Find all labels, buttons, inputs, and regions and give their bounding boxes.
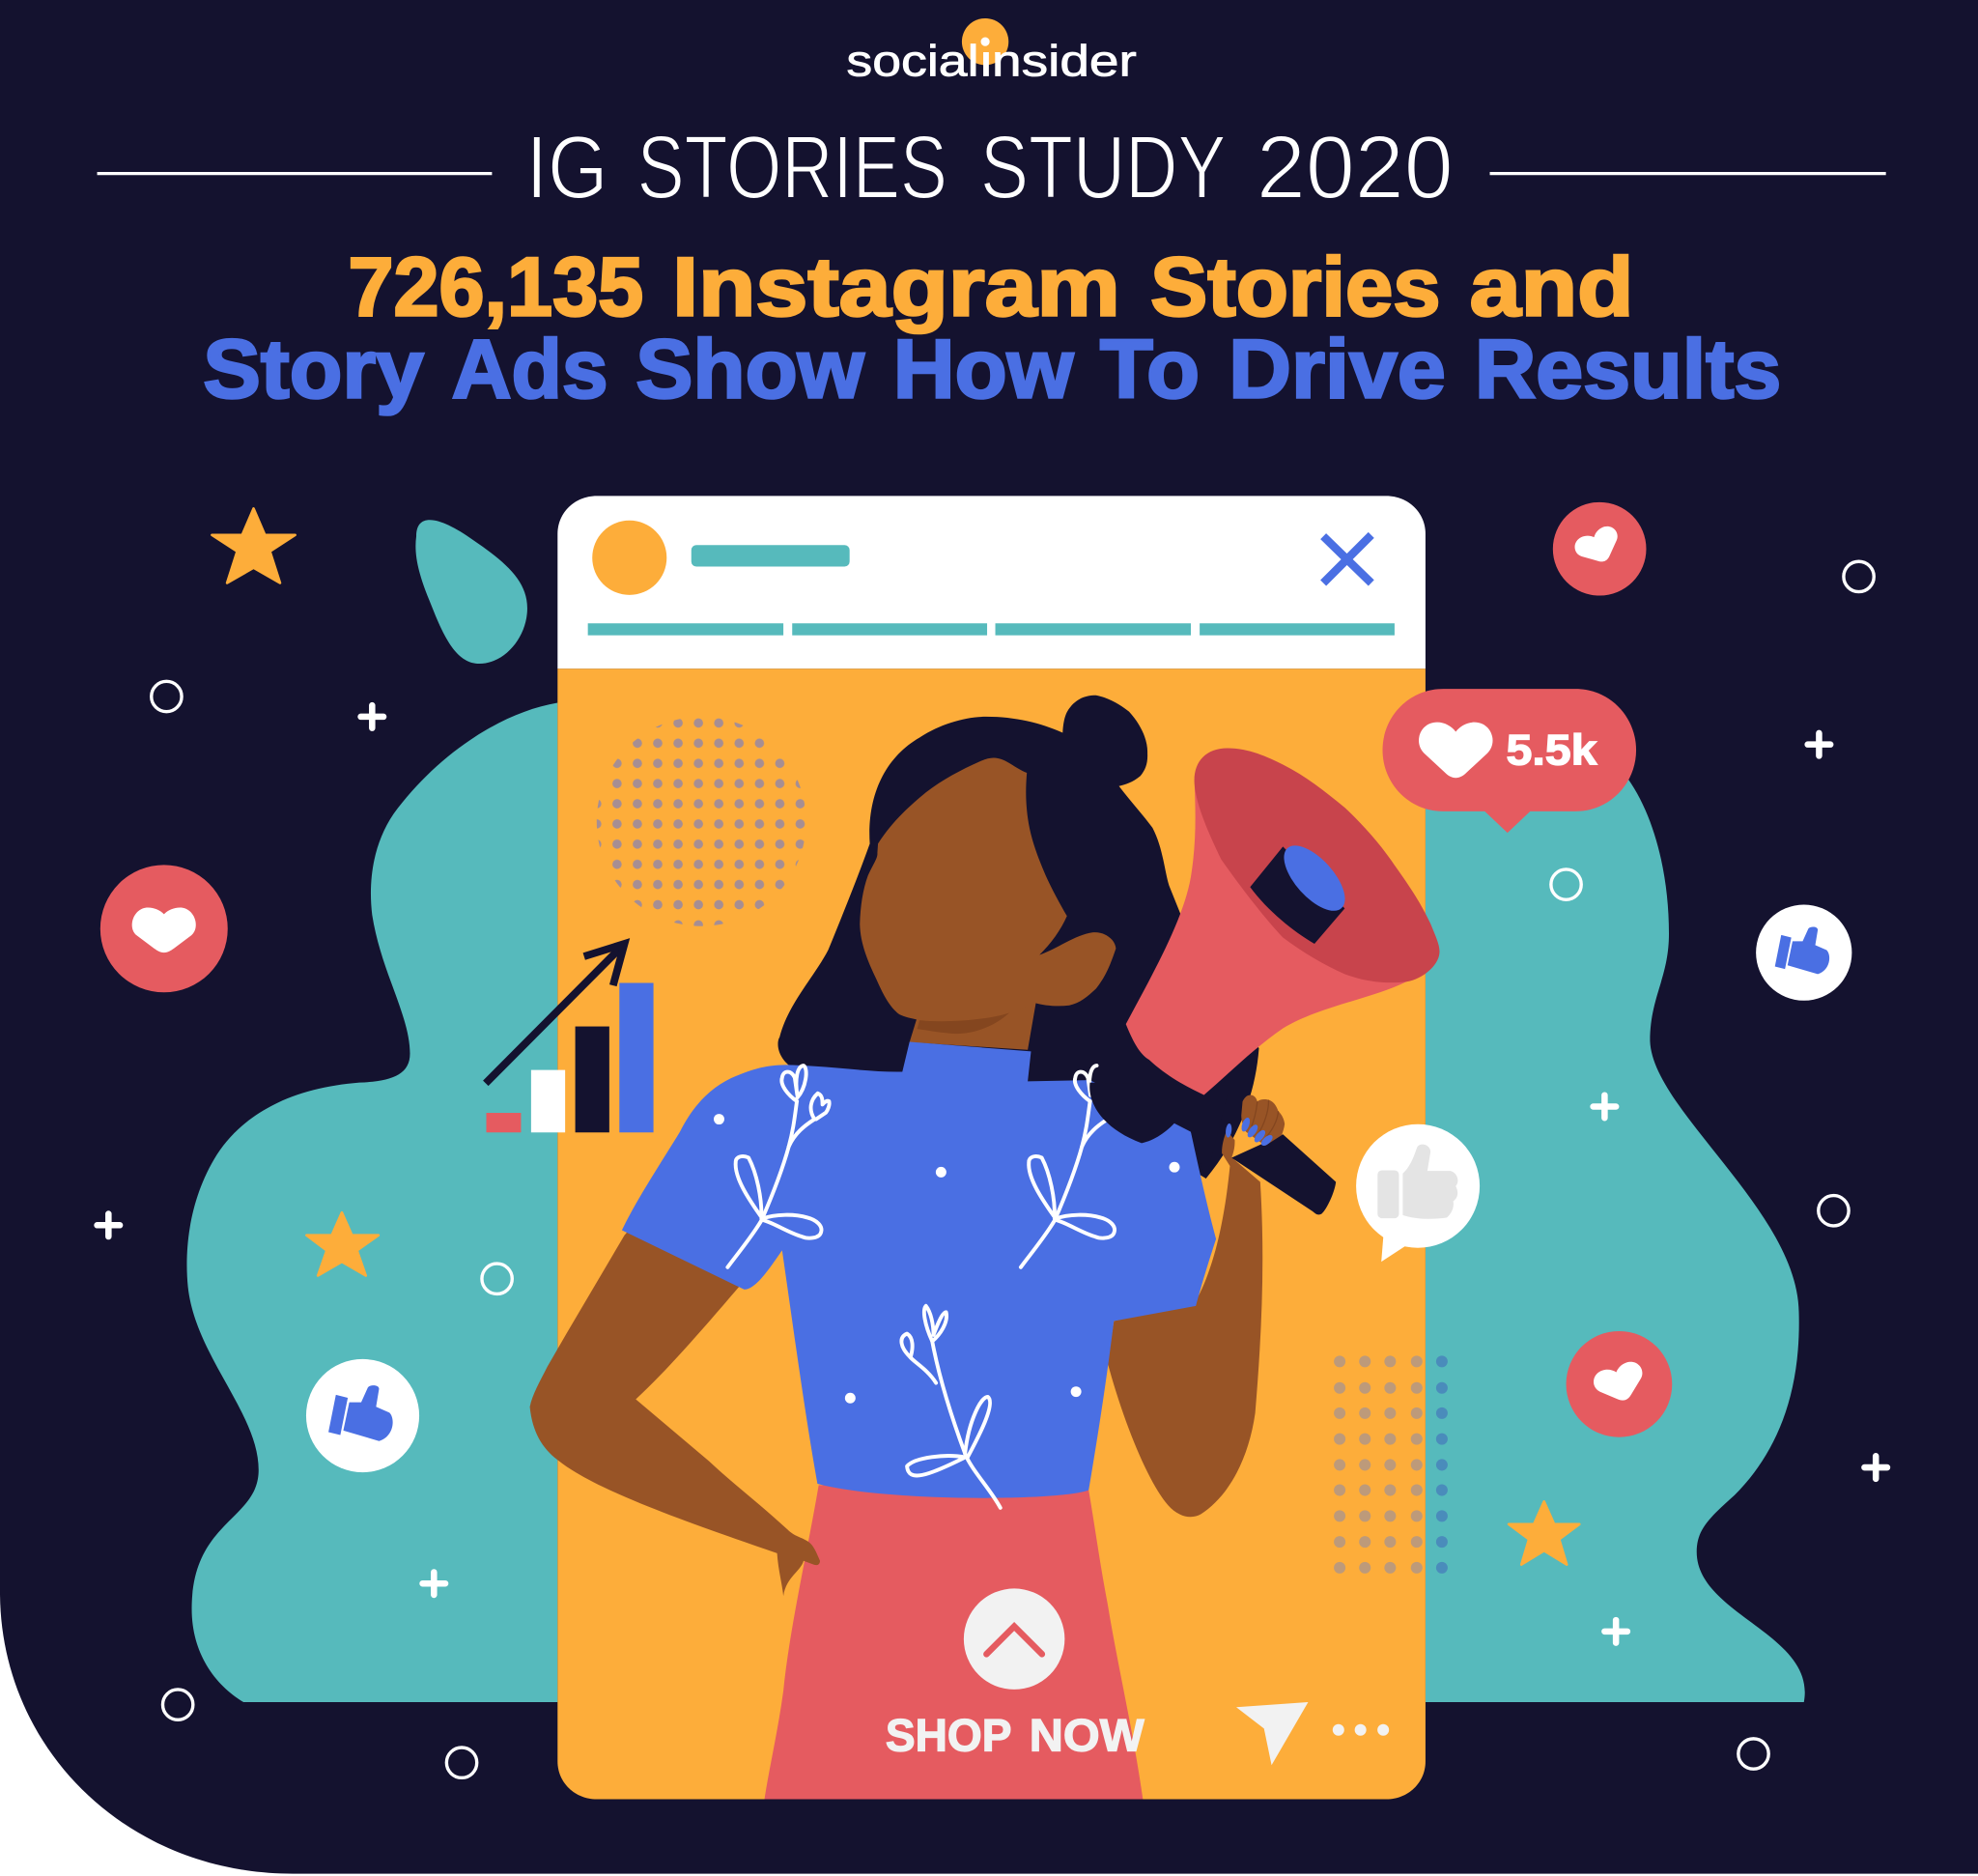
left arm (530, 1199, 820, 1596)
megaphone body (1126, 786, 1439, 1094)
hair front (1089, 1083, 1229, 1179)
headline: Instagram (672, 242, 1120, 334)
title: IG Stories Study 2020: STUDY (980, 117, 1227, 217)
headline: Results (1475, 323, 1781, 415)
hair back (777, 696, 1259, 1179)
like bubble 5.5k: 5.5k (1507, 727, 1597, 775)
blouse (622, 1041, 1216, 1498)
neck shadow (918, 1012, 1009, 1034)
face (860, 758, 1116, 1021)
profile avatar (592, 521, 666, 595)
megaphone cone (1195, 749, 1439, 982)
icon: heart lower right (1567, 1331, 1672, 1437)
card header (557, 496, 1426, 668)
call to action: shop now: SHOP (886, 1709, 1012, 1760)
logo: socialinsider: social (846, 36, 979, 85)
icon: heart top right (1553, 502, 1646, 596)
hand (1222, 1094, 1285, 1166)
title: IG Stories Study 2020: 2020 (1257, 117, 1454, 217)
headline: Drive (1229, 323, 1446, 415)
floral sprig right (1021, 1066, 1115, 1267)
fingernails (1225, 1117, 1275, 1148)
headline: To (1100, 323, 1200, 415)
icon: thumb left (306, 1359, 419, 1472)
megaphone speaker (1250, 846, 1344, 944)
megaphone speaker cap (1273, 836, 1356, 921)
icon: stars (212, 508, 1579, 1565)
close icon (1323, 535, 1371, 583)
icon: decorative rings (152, 561, 1874, 1777)
teal drop (415, 520, 527, 664)
floral sprig left (727, 1066, 830, 1267)
blouse white dots (714, 1114, 1179, 1404)
title: IG Stories Study 2020 (98, 117, 1886, 217)
megaphone handle (1231, 1134, 1336, 1214)
story progress bars (588, 623, 1395, 636)
icon: heart left (100, 865, 228, 992)
username bar (692, 545, 850, 566)
headline: Story (203, 323, 424, 415)
like bubble 5.5k (1383, 689, 1636, 833)
icon: decorative plus signs (98, 705, 1887, 1643)
skirt (765, 1485, 1143, 1800)
headline: Ads (452, 323, 608, 415)
icon: send arrow (1236, 1702, 1308, 1765)
teal blob left (186, 703, 557, 1702)
right arm (1108, 1153, 1262, 1517)
logo: socialinsider: insider (980, 36, 1137, 85)
headline: and (1470, 242, 1633, 334)
headline: How (893, 323, 1074, 415)
title: IG Stories Study 2020: IG (526, 117, 608, 217)
woman with megaphone (530, 696, 1439, 1800)
thumbs up speech bubble (1356, 1124, 1480, 1262)
floral sprig center (901, 1306, 1001, 1508)
bar chart with arrow (486, 944, 654, 1132)
icon: thumb right (1756, 905, 1851, 1001)
halftone dot circle (593, 713, 813, 930)
call to action: shop now: NOW (1030, 1709, 1144, 1760)
card body (557, 668, 1426, 1800)
headline: Show (636, 323, 865, 415)
headline (203, 242, 1781, 415)
neck (910, 997, 1037, 1050)
right halftone dots (1334, 1355, 1448, 1574)
icon: more dots (1333, 1724, 1389, 1736)
headline: 726,135 (348, 242, 643, 334)
logo: socialinsider (846, 18, 1137, 85)
call to action: shop now (886, 1588, 1144, 1760)
teal blob right (1426, 770, 1805, 1702)
title: IG Stories Study 2020: STORIES (637, 117, 947, 217)
story card (557, 496, 1426, 1800)
headline: Stories (1150, 242, 1441, 334)
